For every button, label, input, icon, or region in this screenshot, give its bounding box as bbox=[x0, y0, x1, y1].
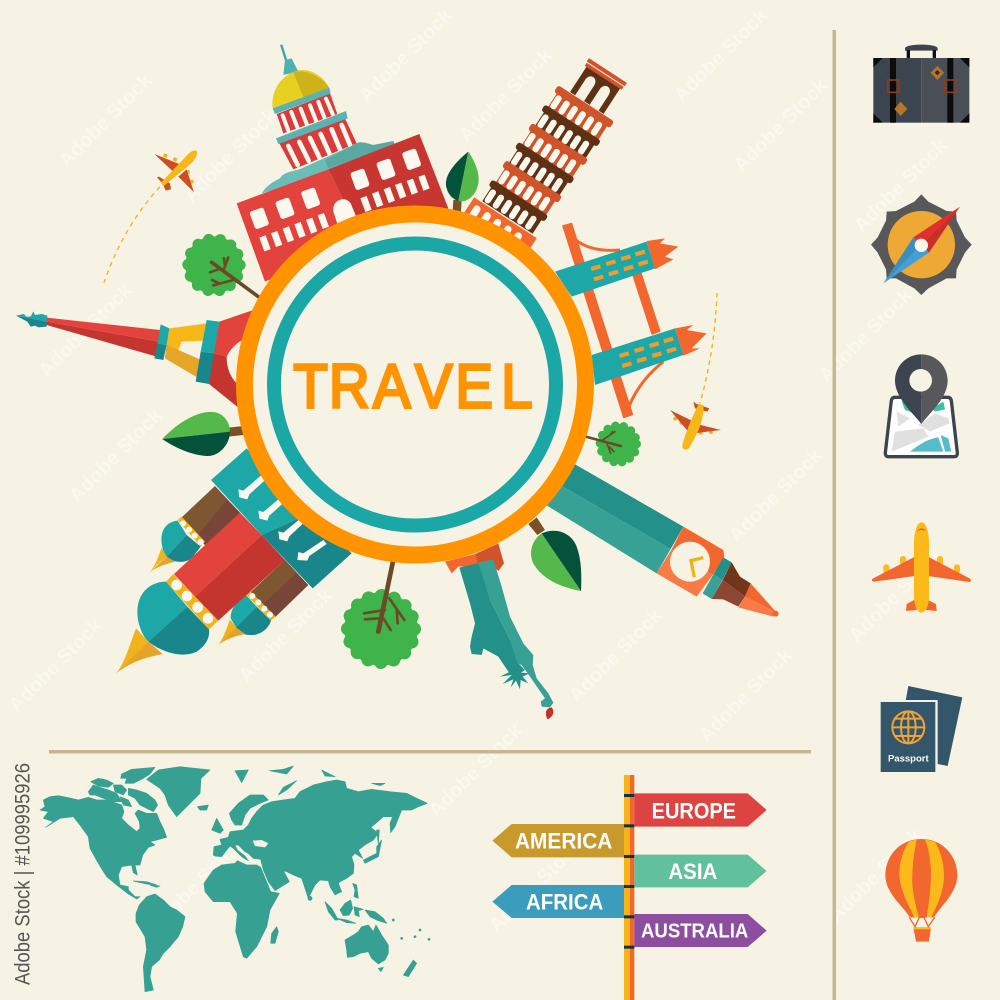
sign: Europe bbox=[634, 793, 767, 827]
landmark: Big Ben bbox=[543, 463, 779, 617]
sign: America bbox=[492, 824, 624, 857]
sign: Africa bbox=[492, 885, 624, 918]
icon: compass bbox=[871, 194, 972, 295]
vertical divider bbox=[832, 30, 836, 1000]
text: Adobe Stock bbox=[730, 74, 832, 177]
orange ring bbox=[244, 214, 586, 555]
landmark: Eiffel tower bbox=[16, 310, 253, 412]
central badge bbox=[244, 214, 586, 555]
Maritime southeast Asia bbox=[325, 902, 338, 920]
landmark: Golden Gate bridge bbox=[555, 223, 707, 418]
tree: top leaf bbox=[446, 152, 479, 212]
landmark: St Basil's cathedral bbox=[116, 448, 352, 673]
teal ring bbox=[274, 244, 556, 526]
text: Adobe Stock bbox=[670, 4, 772, 107]
icon: suitcase bbox=[873, 45, 969, 123]
text: Adobe Stock bbox=[355, 4, 457, 107]
Greenland bbox=[147, 767, 210, 817]
capitol roof bbox=[262, 141, 395, 193]
North America bbox=[40, 796, 167, 899]
South America bbox=[136, 894, 185, 992]
capitol facade bbox=[237, 169, 363, 282]
icon: map with location pin bbox=[885, 354, 957, 457]
text: Adobe Stock bbox=[425, 719, 527, 822]
Eurasia bbox=[213, 780, 427, 898]
sign: America: AMERICA bbox=[515, 829, 612, 854]
text: Adobe Stock bbox=[5, 614, 107, 717]
icon: passports bbox=[880, 686, 962, 773]
sign: Europe: EUROPE bbox=[652, 798, 736, 823]
title: TRAVEL bbox=[293, 351, 533, 421]
sign: Africa: AFRICA bbox=[526, 890, 603, 915]
text: Adobe Stock bbox=[845, 544, 947, 647]
stock credit text: Adobe Stock | #109995926 bbox=[12, 763, 34, 985]
text: Adobe Stock bbox=[695, 644, 797, 747]
Africa bbox=[204, 861, 279, 958]
tree: upper left bbox=[185, 236, 258, 297]
landmark: Statue of Liberty bbox=[445, 543, 553, 719]
plane: right with dashed route bbox=[670, 293, 721, 450]
text: Adobe Stock bbox=[35, 279, 137, 382]
text: Adobe Stock bbox=[850, 134, 952, 237]
landmark: capitol building bbox=[237, 44, 448, 282]
bridge lower tower bbox=[592, 328, 683, 385]
text: Adobe Stock bbox=[55, 69, 157, 172]
text: Adobe Stock bbox=[145, 834, 247, 937]
tree: left leaf bbox=[162, 412, 243, 456]
tree: lower right leaf bbox=[528, 517, 581, 591]
text: Adobe Stock bbox=[180, 104, 282, 207]
sign: Asia: ASIA bbox=[668, 859, 717, 884]
sign: Asia bbox=[634, 855, 767, 887]
text: Adobe Stock bbox=[65, 404, 167, 507]
text: Adobe Stock bbox=[815, 284, 917, 387]
signpost bbox=[492, 775, 767, 1000]
plane: top left with dashed route bbox=[104, 150, 197, 283]
sign: Australia bbox=[634, 914, 767, 947]
text: Adobe Stock bbox=[485, 834, 587, 937]
icon: airplane bbox=[872, 522, 971, 613]
bridge upper tower bbox=[555, 242, 655, 297]
landmark: leaning tower of Pisa bbox=[454, 58, 627, 269]
horizontal divider bbox=[49, 750, 811, 754]
icon: passports: Passport bbox=[888, 754, 929, 764]
tree: bottom bbox=[344, 557, 418, 666]
sign: Australia: AUSTRALIA bbox=[641, 921, 748, 943]
Australia bbox=[345, 925, 388, 964]
Inland seas bbox=[253, 840, 268, 847]
tree: right bbox=[583, 424, 638, 464]
sign pole bbox=[624, 775, 634, 1000]
text: Adobe Stock bbox=[455, 44, 557, 147]
world map bbox=[40, 766, 430, 992]
text: Adobe Stock bbox=[235, 584, 337, 687]
icon: hot air balloon bbox=[885, 839, 957, 942]
text: Adobe Stock bbox=[725, 444, 827, 547]
text: Adobe Stock bbox=[825, 824, 927, 927]
text: Adobe Stock bbox=[565, 604, 667, 707]
